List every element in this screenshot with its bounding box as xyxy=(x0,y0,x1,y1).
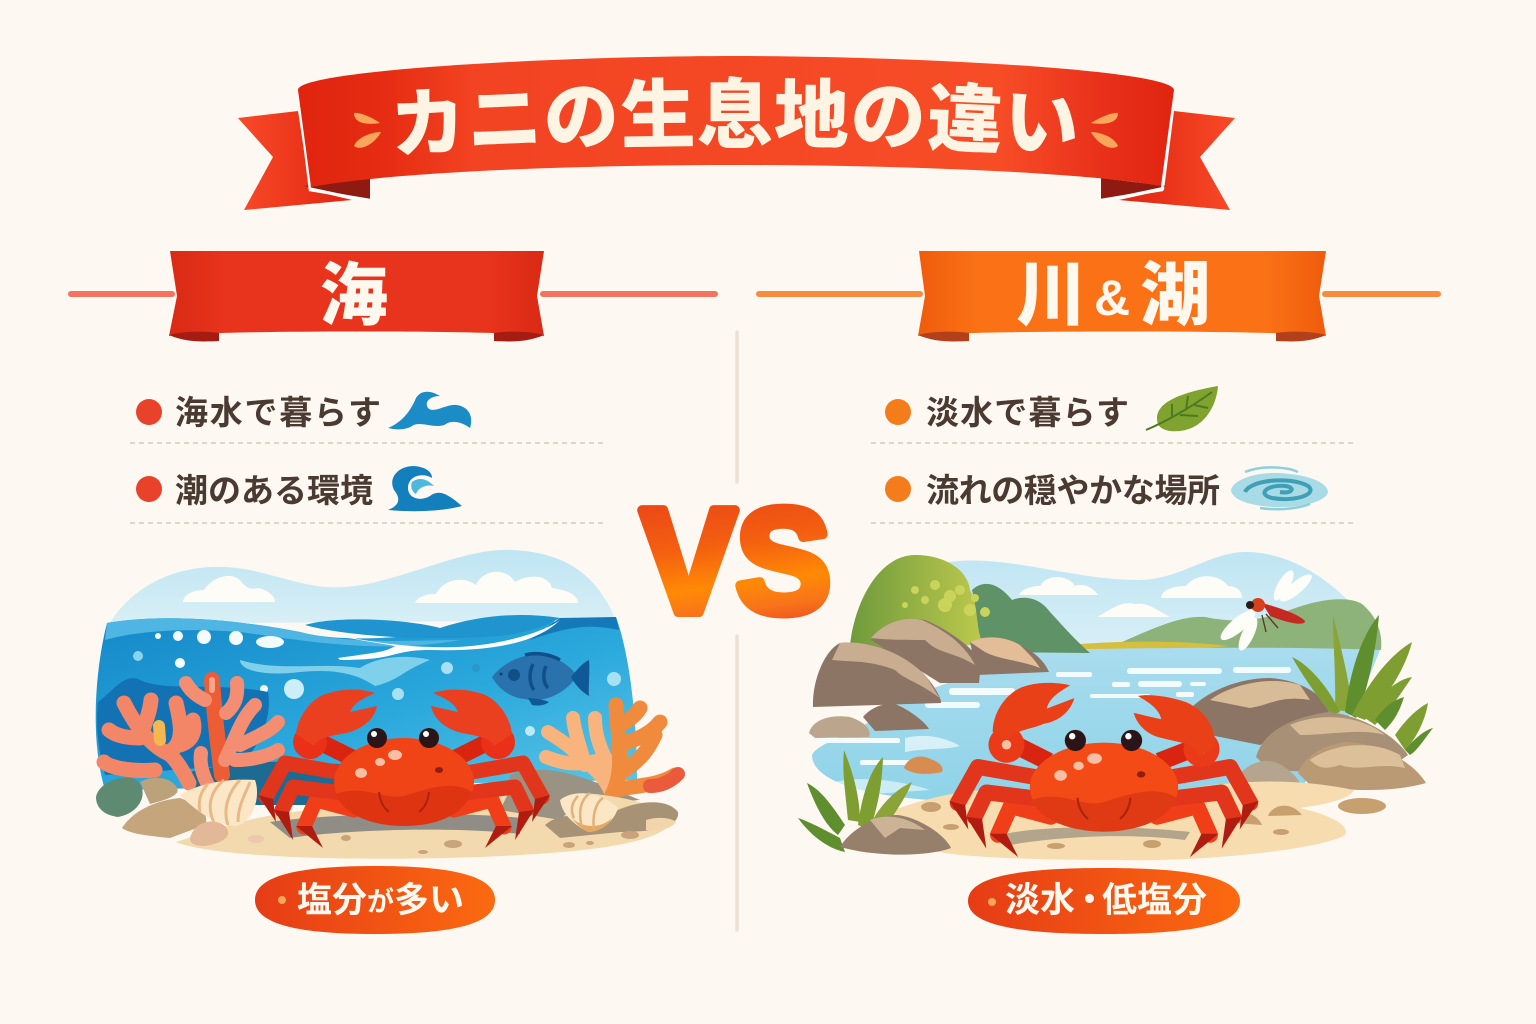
pill text: 淡水 xyxy=(1005,881,1075,920)
legs xyxy=(266,763,542,827)
bubbles xyxy=(133,630,621,736)
header line xyxy=(71,291,715,297)
pebbles xyxy=(921,798,1386,849)
spots xyxy=(388,750,402,760)
divider xyxy=(130,522,606,524)
pill text: 塩分 xyxy=(297,881,367,920)
heading: 湖 xyxy=(1140,256,1210,334)
right ribbon tail xyxy=(1119,111,1235,210)
background reef xyxy=(97,678,269,775)
ribbon xyxy=(918,251,1326,336)
fish xyxy=(492,654,589,706)
VS emblem: VS xyxy=(641,479,831,644)
bullet 1: 海水で暮らす xyxy=(175,394,381,431)
dragonfly xyxy=(1217,568,1315,653)
left list xyxy=(130,392,606,523)
right salinity pill xyxy=(968,868,1240,934)
icon: wave xyxy=(388,392,471,429)
sand pebbles xyxy=(248,831,639,854)
river scene illustration xyxy=(798,552,1433,860)
ribbon xyxy=(169,251,544,336)
clouds xyxy=(1019,576,1242,617)
icon: tide wave xyxy=(388,466,462,511)
sky xyxy=(109,550,616,624)
green hills xyxy=(850,555,992,660)
rocks xyxy=(96,775,678,846)
claws xyxy=(993,683,1074,740)
left coral xyxy=(104,680,278,785)
arms xyxy=(316,740,492,758)
divider xyxy=(871,522,1357,524)
shell xyxy=(334,738,474,826)
arms xyxy=(1011,743,1197,762)
pill shape xyxy=(255,866,495,934)
sand xyxy=(176,792,675,859)
right grass xyxy=(1292,615,1433,755)
right crab xyxy=(949,683,1259,857)
pebbles in water xyxy=(904,757,943,774)
title ribbon xyxy=(238,56,1235,210)
heading: 川 xyxy=(1016,256,1086,334)
icon: swirl xyxy=(1231,467,1328,509)
far hills xyxy=(1122,599,1381,650)
left header: sea xyxy=(71,251,715,341)
right list xyxy=(871,386,1357,523)
ribbon main band xyxy=(298,56,1174,187)
pill shape xyxy=(968,868,1240,934)
sky xyxy=(940,552,1381,650)
bullet 2: 潮のある環境 xyxy=(175,472,373,509)
bullet 1: 淡水で暮らす xyxy=(926,394,1129,431)
pill text: 低塩分 xyxy=(1102,881,1207,920)
rocks xyxy=(809,619,1329,745)
eyes xyxy=(1065,730,1086,751)
spots xyxy=(1087,753,1102,764)
water xyxy=(96,617,637,790)
divider xyxy=(130,442,606,444)
right rocks xyxy=(1238,712,1426,790)
left salinity pill xyxy=(255,866,495,934)
bullet 2: 流れの穏やかな場所 xyxy=(926,472,1220,509)
legs xyxy=(958,767,1250,835)
clouds xyxy=(183,572,578,603)
title text: カニの生息地の違い xyxy=(396,76,1075,156)
left shell xyxy=(180,780,257,826)
divider xyxy=(871,442,1357,444)
heading: 海 xyxy=(320,258,388,334)
shell xyxy=(1030,743,1178,832)
front rock xyxy=(840,815,951,855)
ribbon folds xyxy=(304,178,1167,200)
top water band xyxy=(105,618,460,646)
header line xyxy=(759,291,1438,297)
icon: leaf xyxy=(1146,386,1218,431)
center divider xyxy=(735,332,739,930)
pill text: 多い xyxy=(394,881,464,920)
eyes xyxy=(367,728,387,748)
left grass xyxy=(798,750,912,852)
claws xyxy=(296,690,377,746)
sand xyxy=(888,781,1354,860)
right header: river and lake xyxy=(759,251,1438,341)
sea scene illustration xyxy=(96,550,678,859)
left crab xyxy=(258,690,550,848)
right coral xyxy=(546,705,678,795)
far waves xyxy=(305,615,560,638)
right shell xyxy=(560,793,618,832)
heading: & xyxy=(1094,270,1130,326)
water highlights xyxy=(820,667,1291,795)
left ribbon tail xyxy=(238,111,352,210)
pill text: が xyxy=(367,886,394,917)
title sprigs xyxy=(354,113,1118,148)
water xyxy=(812,648,1380,800)
pill text: ・ xyxy=(1072,881,1107,920)
